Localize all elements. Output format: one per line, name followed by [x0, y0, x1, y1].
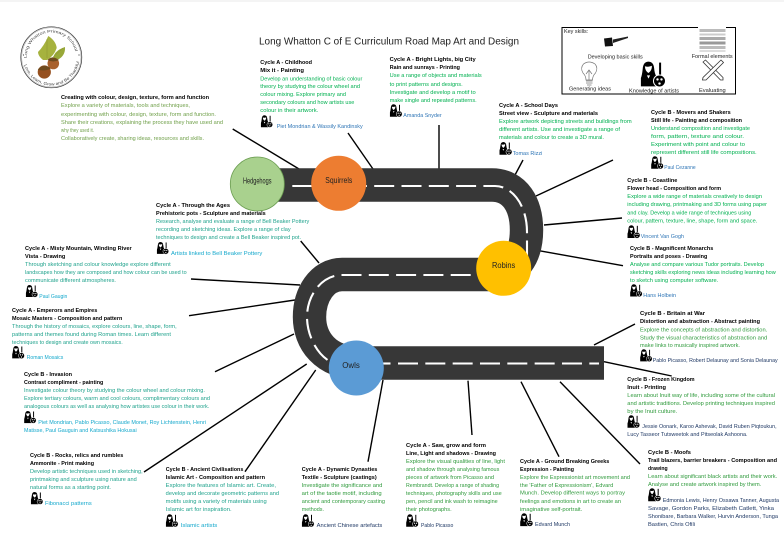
panel: Saw, grow and form: Rembrandt. Develop a range of shading [406, 483, 499, 489]
panel: Moofs: Trail blazers, barrier breakers - Composition and [648, 458, 778, 464]
panel: Coastline: Cycle B - Coastline [627, 178, 677, 184]
panel: Through the Ages [156, 203, 309, 257]
panel: Bright Lights: make single and repeated patterns. [390, 98, 477, 104]
panel: Saw, grow and form [406, 443, 505, 529]
panel: Britain at War [640, 311, 778, 364]
panel: Emperors and Empires [12, 308, 177, 361]
panel: Magnificent Monarchs [630, 246, 777, 299]
school logo: Love, Learn, Grow and Be Thankful [24, 62, 80, 86]
panel: Saw, grow and form: pen, pencil and ink wash to reimagine [406, 499, 498, 505]
panel: Dynamic Dynasties: Investigate the significance and [302, 483, 382, 489]
panel: Frozen Kingdom: by the Inuit culture. [627, 409, 678, 415]
panel: Bright Lights: Rain and sunrays - Printing [390, 65, 461, 71]
title: Long Whatton C of E Curriculum Road Map Art and Design [259, 36, 519, 48]
icon: paint brush [604, 36, 628, 46]
panel: School Days [499, 103, 632, 157]
panel: Through the Ages: Artists linked to Bell Beaker Pottery [171, 251, 262, 257]
panel: Coastline: including drawing, printmaking and 3D forms using paper [627, 202, 767, 208]
icon: artist [651, 156, 664, 169]
panel: Emperors and Empires: Through the history of mosaics, explore colours, line, shape, form, [12, 324, 177, 330]
icon: artist [24, 411, 36, 423]
key skills panel [562, 26, 736, 94]
label: generating ideas: Generating ideas [569, 86, 611, 92]
panel: School Days: Tomas Rizzi [513, 151, 542, 157]
panel: Through the Ages: techniques to design and create a Bell Beaker inspired pot. [156, 235, 301, 241]
panel: Ancient Civilisations: Cycle B - Ancient Civilisations [166, 467, 243, 473]
icon: artist [166, 514, 178, 527]
panel: Coastline: Vincent Van Gogh [641, 234, 684, 240]
panel: Ground Breaking Greeks: Munch. Develop different ways to portray [520, 491, 625, 497]
panel: Dynamic Dynasties: Ancient Chinese artefacts [317, 523, 382, 529]
panel: Moofs: Shonibare, Barbara Walker, Hurvin Anderson, Tunga [648, 514, 779, 520]
panel: Moofs: Bastien, Chris Ofili [648, 522, 695, 528]
school logo [20, 26, 82, 88]
panel: Moofs: Edmonia Lewis, Henry Ossawa Tanner, Augusta [663, 498, 780, 504]
panel: Invasion: Contrast compliment - painting [24, 380, 104, 386]
icon: artist [628, 415, 640, 428]
panel: creating with colour: Creating with colour, design, texture, form and function [61, 95, 210, 101]
panel: Movers and Shakers: Cycle B - Movers and Shakers [651, 110, 731, 116]
panel: Britain at War: Explore the concepts of abstraction and distortion. [640, 327, 768, 333]
school logo: Long Whatton Primary School [24, 30, 78, 58]
panel: Coastline: Explore a wide range of materials creatively to design [627, 194, 762, 200]
panel: Emperors and Empires: techniques to design and create own mosaics. [12, 340, 123, 346]
panel: Emperors and Empires: Mosaic Masters - Composition and pattern [12, 316, 123, 322]
panel: Through the Ages: Research, analyse and evaluate a range of Bell Beaker Pottery [156, 219, 309, 225]
panel: Childhood: Develop an understanding of basic colour [260, 76, 362, 82]
panel: School Days: Cycle A - School Days [499, 103, 558, 109]
panel: Movers and Shakers [651, 110, 757, 171]
label: developing basic skills: Developing basic skills [588, 54, 643, 60]
panel: Movers and Shakers: Experiment with point and colour to [651, 142, 745, 148]
panel: Saw, grow and form: Cycle A - Saw, grow and form [406, 443, 486, 449]
panel: Britain at War: make links to musically inspired artwork. [640, 343, 740, 349]
panel: Misty Mountain [25, 246, 187, 300]
panel: Childhood: Piet Mondrian & Wassily Kandinsky [277, 124, 363, 130]
icon: artist [500, 142, 512, 155]
panel: Invasion: Cycle B - Invasion [24, 372, 73, 378]
panel: Invasion: Matisse, Paul Gauguin and Katsushika Hokusai [24, 428, 137, 434]
panel: Childhood: secondary colours and how artists use [260, 100, 354, 106]
panel: Moofs: Savage, Gordon Parks, Elizabeth Catlett, Yinka [648, 506, 775, 512]
panel: creating with colour: Share their creations, explaining the process they have used and [61, 120, 223, 126]
panel: creating with colour [60, 95, 223, 142]
panel: creating with colour: Explore a variety of materials, tools and techniques, [61, 103, 190, 109]
panel: Ground Breaking Greeks: Cycle A - Ground Breaking Greeks [520, 459, 609, 465]
panel: Saw, grow and form: techniques, photography skills and use [406, 491, 502, 497]
panel: Magnificent Monarchs: Analyse and compare various Tudor portraits. Develop [630, 262, 764, 268]
icon: evaluating crossed pencils [702, 60, 724, 80]
panel: Bright Lights [390, 57, 482, 119]
panel: Britain at War: Study the visual characteristics of abstraction and [640, 335, 767, 341]
panel: Ancient Civilisations: Islamic Art - Composition and pattern [166, 475, 266, 481]
panel: Ground Breaking Greeks: the 'Father of Expressionism', Edvard [520, 483, 613, 489]
panel: Through the Ages: Prehistoric pots - Sculpture and materials [156, 211, 266, 217]
icon: artist [31, 492, 43, 504]
stop: Hedgehogs [230, 157, 284, 211]
panel: Movers and Shakers: Still life - Painting and composition [651, 118, 743, 124]
panel: Rocks, relics and rumbles [30, 453, 143, 507]
panel: Moofs [648, 450, 780, 528]
icon: knowledge of artists [641, 62, 666, 87]
panel: Invasion: Explore tertiary colours, warm and cool colours, complimentary colours and [24, 396, 210, 402]
panel: Rocks, relics and rumbles: printmaking and sculpture using nature and [30, 477, 137, 483]
panel: Ground Breaking Greeks: imaginative self-portrait. [520, 507, 583, 513]
panel: Childhood: theory by studying the colour wheel and [260, 84, 360, 90]
panel: Bright Lights: Investigate and develop a motif to [390, 90, 476, 96]
panel: Dynamic Dynasties: ancient and contemporary casting [302, 499, 385, 505]
panel: Ancient Civilisations [166, 467, 279, 529]
key heading: Key skills: [564, 29, 589, 35]
panel: Ground Breaking Greeks: Edvard Munch [535, 522, 570, 528]
panel: Coastline: Flower head - Composition and form [627, 186, 721, 192]
panel: Rocks, relics and rumbles: natural forms as a starting point. [30, 485, 111, 491]
icon: artist [640, 349, 652, 362]
panel: Saw, grow and form: Line, Light and shadows - Drawing [406, 451, 497, 457]
label: evaluating: Evaluating [699, 88, 726, 94]
panel: Invasion [24, 372, 210, 434]
panel: Ancient Civilisations: motifs using a variety of materials using [166, 499, 267, 505]
panel: Ground Breaking Greeks [520, 459, 630, 528]
panel: Moofs: drawing [648, 466, 668, 472]
panel: Dynamic Dynasties: art of the taotie motif, including [302, 491, 382, 497]
panel: Britain at War: Pablo Picasso, Robert Delaunay and Sonia Delaunay [653, 358, 778, 364]
panel: Rocks, relics and rumbles: Develop artistic techniques used in sketching, [30, 469, 143, 475]
panel: Magnificent Monarchs: Hans Holbein [643, 293, 676, 299]
panel: Rocks, relics and rumbles: Ammonite - Print making [30, 461, 95, 467]
road [270, 185, 604, 364]
panel: Ancient Civilisations: Islamic artists [181, 523, 218, 529]
panel: Rocks, relics and rumbles: Fibonacci patterns [45, 501, 92, 507]
panel: School Days: different artists. Use and investigate a range of [499, 127, 620, 133]
panel: Bright Lights: to print patterns and designs. [390, 82, 463, 88]
panel: Bright Lights: Amanda Snyder [403, 113, 442, 119]
connector lines [144, 125, 672, 472]
panel: School Days: Street view - Sculpture and materials [499, 111, 598, 117]
panel: Ancient Civilisations: Islamic art for inspiration. [166, 507, 232, 513]
panel: Ancient Civilisations: develop and decorate geometric patterns and [166, 491, 279, 497]
panel: Misty Mountain: Vista - Drawing [25, 254, 66, 260]
panel: Frozen Kingdom [627, 377, 777, 438]
panel: Movers and Shakers: Paul Cezanne [664, 165, 696, 171]
panel: Britain at War: Distortion and abstraction - Abstract painting [640, 319, 761, 325]
icon: artist [302, 514, 314, 527]
panel: Dynamic Dynasties: Cycle A - Dynamic Dynasties [302, 467, 377, 473]
panel: creating with colour: experimenting with colour, design, texture, form and function. [61, 112, 216, 118]
panel: Emperors and Empires: patterns and themes found during Roman times. Learn different [12, 332, 171, 338]
panel: Magnificent Monarchs: sketching skills exploring news ideas including learning how [630, 270, 777, 276]
label: formal elements: Formal elements [692, 54, 733, 60]
panel: Coastline: colour, pattern, texture, line, shape, form and space. [627, 218, 758, 224]
panel: Britain at War: Cycle B - Britain at War [640, 311, 706, 317]
panel: Childhood: Mix it - Painting [260, 68, 305, 74]
icon: artist [406, 514, 418, 527]
stop: Owls: Owls [342, 361, 360, 370]
panel: Frozen Kingdom: Inuit - Printing [627, 385, 667, 391]
panel: Ground Breaking Greeks: Expression - Painting [520, 467, 575, 473]
panel: Invasion: analogous colours as well as analysing how artistes use colour in their work. [24, 404, 210, 410]
panel: School Days: materials and colour to create a 3D mural. [499, 135, 604, 141]
panel: Through the Ages: recording and sketching ideas. Explore a range of clay [156, 227, 291, 233]
panel: Childhood: Cycle A - Childhood [260, 60, 313, 66]
panel: Childhood [260, 60, 363, 130]
icon: artist [26, 285, 38, 297]
panel: Dynamic Dynasties: Textile - Sculpture (castings) [302, 475, 377, 481]
panel: Magnificent Monarchs: to sketch using computer software. [630, 278, 719, 284]
panel: Through the Ages: Cycle A - Through the Ages [156, 203, 230, 209]
panel: Ancient Civilisations: Explore the features of Islamic art. Create, [166, 483, 276, 489]
icon: light bulb [582, 62, 597, 85]
stop: Robins: Robins [492, 261, 515, 270]
panel: Saw, grow and form: Pablo Picasso [421, 523, 453, 529]
stop: Squirrels [311, 156, 366, 211]
stop: Robins [476, 241, 531, 296]
panel: Frozen Kingdom: Learn about Inuit way of life, including some of the cultural [627, 393, 775, 399]
icon: formal elements swatches [698, 26, 726, 52]
stop: Hedgehogs: Hedgehogs [243, 176, 272, 186]
panel: Moofs: Analyse and create artwork inspired by them. [648, 482, 762, 488]
icon: artist [520, 513, 533, 526]
panel: Misty Mountain: Through sketching and colour knowledge explore different [25, 262, 171, 268]
panel: Moofs: Learn about significant black artists and their work. [648, 474, 778, 480]
panel: Rocks, relics and rumbles: Cycle B - Rocks, relics and rumbles [30, 453, 123, 459]
panel: Ground Breaking Greeks: Explore the Expressionist art movement and [520, 475, 630, 481]
panel: Movers and Shakers: Understand composition and investigate [651, 126, 750, 132]
panel: Frozen Kingdom: and artistic traditions. Develop printing techniques inspired [627, 401, 775, 407]
panel: Moofs: Cycle B - Moofs [648, 450, 691, 456]
panel: Ground Breaking Greeks: feelings and emotions in art to create an [520, 499, 621, 505]
icon: artist [628, 225, 640, 238]
panel: Magnificent Monarchs: Portraits and poses - Drawing [630, 254, 708, 260]
panel: Childhood: colour mixing. Explore primary and [260, 92, 346, 98]
panel: Saw, grow and form: and shadow through analysing famous [406, 467, 499, 473]
panel: Misty Mountain: landscapes how they are composed and how colour can be used to [25, 270, 187, 276]
panel: Emperors and Empires: Cycle A - Emperors and Empires [12, 308, 97, 314]
panel: Misty Mountain: communicate different atmospheres. [25, 278, 116, 284]
panel: Frozen Kingdom: Cycle B - Frozen Kingdom [627, 377, 695, 383]
panel: Invasion: Investigate colour theory by studying the colour wheel and colour mixing. [24, 388, 205, 394]
icon: artist [12, 346, 24, 359]
panel: creating with colour: Collaboratively create, sharing ideas, resources and skills. [61, 136, 204, 142]
panel: Frozen Kingdom: Jessie Oonark, Karoo Ashevak, David Ruben Piqtoukun, [642, 424, 777, 430]
panel: Saw, grow and form: their photographs. [406, 507, 452, 513]
panel: creating with colour: why they used it. [60, 128, 94, 134]
panel: Movers and Shakers: form, pattern, texture and colour. [651, 134, 745, 140]
panel: Bright Lights: Cycle A - Bright Lights, big City [390, 57, 477, 63]
icon: artist [261, 115, 273, 128]
panel: Saw, grow and form: Explore the visual qualities of line, light [406, 459, 505, 465]
panel: Saw, grow and form: pieces of artwork from Picasso and [406, 475, 494, 481]
icon: artist [390, 104, 402, 117]
panel: Frozen Kingdom: Lucy Tasseor Tutsweetok and Pitseolak Ashoona. [627, 432, 748, 438]
panel: Childhood: colour in their artwork. [260, 108, 319, 114]
icon: artist [630, 284, 642, 297]
icon: artist [648, 488, 661, 502]
panel: Coastline: and clay. Develop a wide range of techniques using [627, 210, 751, 216]
stop: Owls [329, 340, 384, 396]
panel: School Days: Explore artwork depicting streets and buildings from [499, 119, 632, 125]
panel: Coastline [627, 178, 767, 240]
label: knowledge of artists: Knowledge of artists [629, 88, 679, 94]
panel: Dynamic Dynasties: methods. [302, 507, 324, 513]
panel: Bright Lights: Use a range of objects and materials [390, 73, 482, 79]
panel: Movers and Shakers: represent different still life compositions. [651, 150, 757, 156]
panel: Magnificent Monarchs: Cycle B - Magnificent Monarchs [630, 246, 713, 252]
panel: Misty Mountain: Paul Gaugin [39, 294, 67, 300]
panel: Emperors and Empires: Roman Mosaics [27, 355, 63, 361]
stop: Squirrels: Squirrels [325, 176, 352, 185]
icon: artist [157, 242, 169, 254]
panel: Invasion: Piet Mondrian, Pablo Picasso, Claude Monet, Roy Lichtenstein, Henri [38, 420, 206, 426]
panel: Misty Mountain: Cycle A - Misty Mountain, Winding River [25, 246, 133, 252]
panel: Dynamic Dynasties [302, 467, 385, 529]
